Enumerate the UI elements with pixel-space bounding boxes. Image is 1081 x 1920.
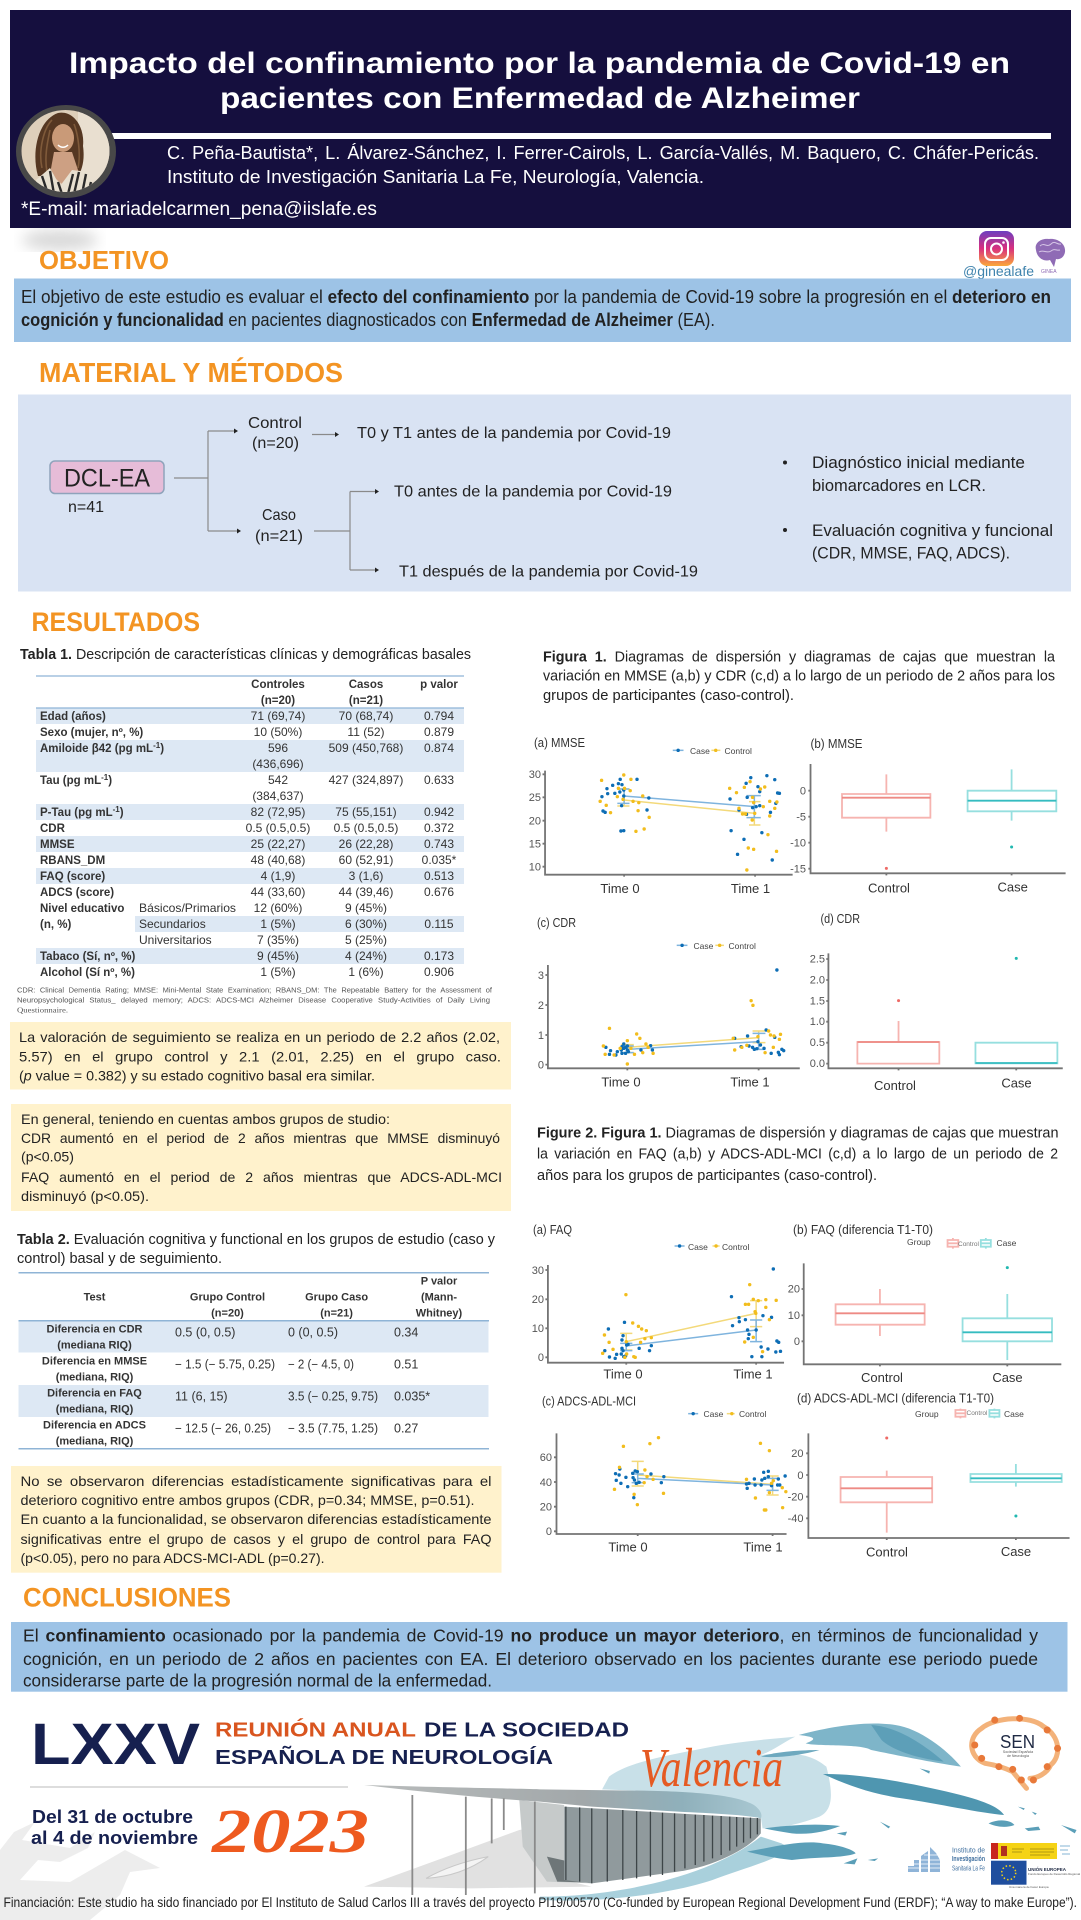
table 1: 1 (5%) (260, 917, 296, 931)
instagram handle: @ginealafe (963, 263, 1034, 279)
chart: figure 1d CDR boxplot: (d) CDR (820, 912, 860, 926)
callout: seguimiento: 5.57) en el grupo control y 2.1 (2.01, 2.25) en el grupo caso. (19, 1048, 501, 1064)
chart: figure 1b MMSE boxplot: Control (868, 880, 910, 896)
event title: DE LA SOCIEDAD (424, 1720, 629, 1742)
chart: figure 2d ADCS boxplot: 0 (797, 1470, 804, 1482)
table 1: 0.372 (424, 821, 454, 835)
logo: European Union: Fondo Europeo de Desarrollo Regional (1028, 1872, 1080, 1876)
logo: Instituto de Investigación: Investigación (952, 1854, 985, 1863)
chart: figure 2a FAQ scatter: 30 (532, 1265, 544, 1277)
table 1: Controles (251, 679, 305, 691)
table 2: Grupo Control (190, 1292, 265, 1304)
table 1: 0.5 (0.5,0.5) (334, 821, 398, 835)
label n=41: n=41 (68, 499, 104, 516)
chart: figure 2a FAQ scatter: 10 (532, 1323, 544, 1335)
table 2 caption (17, 1232, 496, 1267)
box: DCL-EA (50, 461, 164, 494)
callout: seguimiento: La valoración de seguimiento se realiza en un periodo de 2.2 años (2.02, (19, 1029, 500, 1045)
title: pacientes con Enfermedad de Alzheimer (220, 82, 860, 115)
bullet list: biomarcadores en LCR. (812, 476, 986, 495)
table 1: 0.5 (0.5,0.5) (246, 821, 310, 835)
callout: resultados generales: disminuyó (p<0.05). (21, 1188, 149, 1204)
table 1 footnote: Questionnaire. (17, 1006, 68, 1014)
bullet list (783, 453, 1053, 562)
table 1: MMSE (40, 839, 75, 851)
panel: conclusiones: cognición, en un periodo de 2 años en pacientes con EA. El deterioro observado en los pacientes durante ese periodo puede (23, 1649, 1038, 1669)
logo: European Union: UNIÓN EUROPEA (1028, 1865, 1067, 1872)
table 2: (mediana RIQ) (57, 1339, 132, 1351)
table 2 (18, 1273, 489, 1449)
chart: figure 2b FAQ boxplot (788, 1223, 1061, 1385)
table 1: 6 (30%) (345, 917, 387, 931)
chart: figure 1d CDR boxplot: 0.0 (810, 1058, 825, 1070)
table 1: p valor (420, 679, 458, 691)
figure 1 caption (543, 650, 1056, 704)
group labels (248, 415, 698, 580)
table 1: 0.743 (424, 837, 454, 851)
table 2: Diferencia en MMSE (42, 1355, 147, 1367)
chart: figure 2c ADCS scatter: Time 1 (743, 1540, 783, 1555)
logo: Instituto de Investigación: Instituto de (952, 1846, 985, 1855)
table 1: 0.513 (424, 869, 454, 883)
watercolor and building illustration (364, 1723, 1077, 1901)
table 1: FAQ (score) (40, 871, 105, 883)
chart: figure 2d ADCS boxplot: Control (966, 1410, 988, 1417)
chart: figure 2b FAQ boxplot: Case (996, 1238, 1017, 1248)
table 1: Básicos/Primarios (139, 901, 236, 915)
chart: figure 1d CDR boxplot: Case (1001, 1076, 1032, 1090)
callout: diferencias: No se observaron diferencias estadísticamente significativas para el (20, 1473, 492, 1489)
chart: figure 2b FAQ boxplot: 0 (794, 1336, 800, 1348)
table 1: 9 (45%) (345, 901, 387, 915)
chart: figure 2b FAQ boxplot: (b) FAQ (diferencia T1-T0) (793, 1223, 933, 1237)
logo: Instituto de Investigación (908, 1846, 985, 1873)
table 1: Casos (349, 679, 383, 691)
panel: objetivo: El objetivo de este estudio es evaluar el efecto del confinamiento por la pandemia de Covid-19 sobre la progresión en el deterioro en (21, 287, 1051, 307)
table 1: -1 (101, 773, 109, 782)
callout: diferencias: significativas entre el grupo de casos y el grupo de control para FAQ (20, 1531, 492, 1547)
table 1: 0.035* (422, 853, 457, 867)
table 1: 75 (55,151) (335, 805, 397, 819)
chart: figure 1d CDR boxplot: 1.5 (810, 996, 825, 1008)
table 1 caption: Tabla 1. Descripción de características clínicas y demográficas basales (20, 647, 471, 663)
authors (167, 143, 1039, 187)
callout: seguimiento: (p value = 0.382) y su estado cognitivo basal era similar. (19, 1068, 375, 1084)
chart: figure 2a FAQ scatter (532, 1223, 784, 1382)
table 1: 10 (50%) (254, 725, 302, 739)
chart: figure 2d ADCS boxplot: 20 (791, 1448, 804, 1460)
table 1 footnote: Neuropsychological Status_ delayed memory; ADCS: ADCS-MCI Alzheimer Disease Cooperative Study-Activities of Daily Living (17, 996, 490, 1004)
table 1: CDR (40, 823, 66, 835)
table 1: (n=20) (261, 695, 295, 707)
event title: REUNIÓN ANUAL (215, 1718, 416, 1742)
logo: Spain ministry (991, 1843, 1070, 1859)
chart: figure 1c CDR scatter: Case (694, 941, 714, 951)
callout: seguimiento (10, 1022, 511, 1090)
heading: objetivo: OBJETIVO (39, 245, 169, 275)
icon: brain logo: GINEA (1041, 269, 1057, 275)
chart: figure 2d ADCS boxplot: -40 (788, 1513, 804, 1525)
box: DCL-EA: DCL-EA (64, 464, 150, 492)
table 1: 0.115 (424, 917, 454, 931)
figure 2 caption: Figure 2. Figura 1. Diagramas de dispersión y diagramas de cajas que muestran (537, 1126, 1058, 1142)
table 1: 0.676 (424, 885, 454, 899)
chart: figure 1b MMSE boxplot (790, 737, 1066, 896)
table 2: (mediana, RIQ) (56, 1403, 134, 1415)
table 1: 4 (1,9) (261, 869, 295, 883)
figure 2 caption: la variación en FAQ (a,b) y ADCS-ADL-MCI (c,d) a lo largo de un periodo de 2 (537, 1147, 1058, 1163)
table 1: 4 (24%) (345, 949, 387, 963)
table 2: − 12.5 (− 26, 0.25) (175, 1422, 271, 1436)
figure 2 caption (537, 1126, 1058, 1184)
table 2: 11 (6, 15) (175, 1390, 228, 1404)
chart: figure 1a MMSE scatter: Control (724, 746, 752, 756)
chart: figure 2b FAQ boxplot: Control (861, 1370, 903, 1385)
table 2: 0.27 (394, 1422, 418, 1436)
table 2: Grupo Caso (305, 1292, 368, 1304)
chart: figure 1c CDR scatter: Time 0 (601, 1074, 641, 1090)
chart: figure 1a MMSE scatter: Case (690, 746, 710, 756)
bullet list: Evaluación cognitiva y funcional (812, 521, 1053, 540)
chart: figure 1a MMSE scatter: Time 0 (600, 881, 640, 896)
panel: conclusiones: considerarse parte de la progresión normal de la enfermedad. (23, 1671, 492, 1691)
group labels: T0 antes de la pandemia por Covid-19 (394, 484, 672, 500)
banner: congreso artwork (0, 1712, 1080, 1920)
table 1: 7 (35%) (257, 933, 299, 947)
callout: resultados generales (11, 1104, 511, 1211)
table 2 caption: control) basal y de seguimiento. (17, 1251, 222, 1267)
table 1: Amiloide β42 (pg mL (40, 743, 153, 755)
panel: objetivo: cognición y funcionalidad en pacientes diagnosticados con Enfermedad de Alzheimer (EA). (21, 310, 715, 330)
chart: figure 1a MMSE scatter (529, 736, 793, 896)
table 1: 0.633 (424, 773, 454, 787)
heading: material y métodos: MATERIAL Y MÉTODOS (39, 357, 343, 388)
chart: figure 1c CDR scatter: Control (728, 941, 756, 951)
bullet list: Diagnóstico inicial mediante (812, 453, 1025, 472)
panel: conclusiones: El confinamiento ocasionado por la pandemia de Covid-19 no produce un mayor deterioro, en términos de funcionalidad y (23, 1626, 1038, 1646)
chart: figure 2a FAQ scatter: Time 1 (733, 1366, 773, 1382)
chart: figure 2c ADCS scatter: Time 0 (608, 1540, 648, 1555)
table 1: 542 (268, 773, 288, 787)
table 1: 0.879 (424, 725, 454, 739)
logo: European Union (991, 1861, 1080, 1889)
callout: resultados generales: (p<0.05) (21, 1148, 74, 1164)
table 1: 48 (40,68) (251, 853, 305, 867)
event title: LXXV (31, 1712, 200, 1777)
chart: figure 1d CDR boxplot: 2.0 (810, 974, 825, 986)
group labels: (n=20) (252, 435, 299, 452)
table 2: Diferencia en ADCS (43, 1419, 146, 1431)
table 2: (mediana, RIQ) (56, 1435, 134, 1447)
authors: Instituto de Investigación Sanitaria La Fe, Neurología, Valencia. (167, 167, 704, 187)
callout: resultados generales: FAQ aumentó en el period de 2 años mientras que ADCS-ADL-MCI (21, 1169, 502, 1185)
table 1: Alcohol (Sí nº, %) (40, 967, 135, 979)
table 1: 3 (1,6) (349, 869, 383, 883)
chart: figure 1a MMSE scatter: 20 (529, 816, 541, 828)
logo: SEN (972, 1718, 1058, 1788)
table 1: 12 (60%) (254, 901, 302, 915)
table 1: (n, %) (40, 919, 71, 931)
header banner (10, 10, 1071, 228)
chart: figure 2d ADCS boxplot: -20 (788, 1492, 804, 1504)
panel: material y métodos (18, 394, 1071, 592)
table 1: 9 (45%) (257, 949, 299, 963)
chart: figure 1a MMSE scatter: (a) MMSE (534, 736, 585, 750)
chart: figure 2a FAQ scatter: Case (688, 1242, 708, 1252)
chart: figure 1b MMSE boxplot: -15 (790, 864, 806, 876)
table 1: -1 (153, 741, 161, 750)
email: *E-mail: mariadelcarmen_pena@iislafe.es (21, 199, 377, 220)
heading: conclusiones: CONCLUSIONES (23, 1583, 231, 1613)
chart: figure 2b FAQ boxplot: Case (992, 1370, 1023, 1385)
table 1: 44 (39,46) (339, 885, 393, 899)
chart: figure 2a FAQ scatter: Time 0 (603, 1366, 643, 1382)
table 2: (Mann- (421, 1292, 457, 1304)
year: 2023 (211, 1798, 369, 1866)
event dates (31, 1807, 198, 1848)
chart: figure 2c ADCS scatter (540, 1395, 787, 1555)
chart: figure 2a FAQ scatter: Control (722, 1242, 750, 1252)
chart: figure 2b FAQ boxplot: 10 (788, 1310, 800, 1322)
table 2: 0.035* (394, 1390, 430, 1404)
chart: figure 2c ADCS scatter: 60 (540, 1452, 552, 1464)
table 1: Secundarios (139, 917, 206, 931)
city: Valencia (640, 1737, 783, 1798)
table 1 footnote: CDR: Clinical Dementia Rating; MMSE: Mini-Mental State Examination; RBANS_DM: The Repeatable Battery for the Assessment of (17, 986, 493, 994)
title: Impacto del confinamiento por la pandemia de Covid-19 en (69, 47, 1010, 80)
chart: figure 1c CDR scatter: 0 (538, 1060, 544, 1072)
table 2: 0.51 (394, 1358, 418, 1372)
table 1: 0.173 (424, 949, 454, 963)
callout: diferencias (11, 1466, 502, 1573)
table 1: Nivel educativo (40, 903, 124, 915)
logo: Instituto de Investigación: Sanitaria La Fe (952, 1864, 985, 1873)
table 1 (36, 676, 464, 979)
table 1: RBANS_DM (40, 855, 105, 867)
bullet list: (CDR, MMSE, FAQ, ADCS). (812, 544, 1010, 562)
chart: figure 2d ADCS boxplot (788, 1392, 1070, 1560)
event dates: Del 31 de octubre (32, 1807, 193, 1827)
table 2: − 1.5 (− 5.75, 0.25) (175, 1358, 275, 1372)
table 2: Diferencia en FAQ (47, 1387, 142, 1399)
chart: figure 2c ADCS scatter: Case (704, 1409, 724, 1419)
table 1: 26 (22,28) (339, 837, 393, 851)
chart: figure 1d CDR boxplot: 0.5 (810, 1037, 825, 1049)
chart: figure 2a FAQ scatter: (a) FAQ (533, 1223, 572, 1237)
title (69, 47, 1010, 115)
table 1: ADCS (score) (40, 887, 114, 899)
group labels: (n=21) (255, 528, 303, 545)
chart: figure 2d ADCS boxplot: Control (866, 1545, 908, 1560)
chart: figure 2b FAQ boxplot: Control (958, 1241, 980, 1248)
table 2: (n=21) (320, 1308, 353, 1320)
table 2: 0 (0, 0.5) (288, 1326, 338, 1340)
table 1: (n=21) (349, 695, 383, 707)
logo: SEN: Sociedad Española (1003, 1750, 1033, 1754)
table 1: Tau (pg mL (40, 775, 101, 787)
chart: figure 2d ADCS boxplot: Group (915, 1409, 939, 1419)
table 2: (mediana, RIQ) (56, 1371, 134, 1383)
chart: figure 2c ADCS scatter: 20 (540, 1502, 552, 1514)
table 1: 596 (268, 741, 288, 755)
chart: figure 1b MMSE boxplot: -10 (790, 838, 806, 850)
table 1: 70 (68,74) (339, 709, 393, 723)
table 1: ) (120, 807, 124, 819)
logo: SEN: de Neurología (1007, 1754, 1029, 1758)
table 1: Tabaco (Sí, nº, %) (40, 951, 136, 963)
table 2: 3.5 (− 0.25, 9.75) (288, 1390, 378, 1404)
table 2: Whitney) (416, 1308, 463, 1320)
table 2: Diferencia en CDR (47, 1323, 143, 1335)
table 2: (n=20) (211, 1308, 244, 1320)
callout: diferencias: deterioro cognitivo entre ambos grupos (CDR, p=0.34; MMSE, p=0.51). (20, 1492, 474, 1508)
chart: figure 2d ADCS boxplot: (d) ADCS-ADL-MCI (diferencia T1-T0) (797, 1392, 994, 1406)
figure 1 caption: variación en MMSE (a,b) y CDR (c,d) a lo largo de un periodo de 2 años para los (543, 669, 1055, 685)
table 1: Universitarios (139, 933, 212, 947)
chart: figure 1d CDR boxplot: 2.5 (810, 954, 825, 966)
figure 2 caption: años para los grupos de participantes (caso-control). (537, 1168, 877, 1184)
table 1: Edad (años) (40, 711, 106, 723)
table 1: 0.874 (424, 741, 454, 755)
table 1: 0.906 (424, 965, 454, 979)
icon: brain logo (1036, 239, 1065, 275)
panel: objetivo (14, 278, 1071, 342)
table 1: P-Tau (pg mL (40, 807, 113, 819)
chart: figure 1d CDR boxplot (810, 912, 1063, 1093)
chart: figure 1a MMSE scatter: Time 1 (731, 881, 770, 896)
event title (31, 1712, 629, 1777)
table 1: 25 (22,27) (251, 837, 305, 851)
table 1: 1 (5%) (260, 965, 296, 979)
table 2: 0.34 (394, 1326, 418, 1340)
chart: figure 2b FAQ boxplot: 20 (788, 1284, 800, 1296)
chart: figure 1c CDR scatter (537, 916, 800, 1090)
chart: figure 1b MMSE boxplot: 0 (800, 786, 806, 798)
table 1: Sexo (mujer, nº, %) (40, 727, 143, 739)
chart: figure 1a MMSE scatter: 25 (529, 792, 541, 804)
chart: figure 2c ADCS scatter: Control (739, 1409, 767, 1419)
table 1: 1 (6%) (348, 965, 384, 979)
author photo (16, 105, 116, 198)
table 1: 11 (52) (347, 725, 385, 739)
table 1: 0.794 (424, 709, 454, 723)
table 1: 60 (52,91) (339, 853, 393, 867)
heading: resultados: RESULTADOS (32, 607, 200, 637)
authors: C. Peña-Bautista*, L. Álvarez-Sánchez, I. Ferrer-Cairols, L. García-Vallés, M. Baquero, C. Cháfer-Pericás. (167, 143, 1039, 163)
table 1: 427 (324,897) (329, 773, 403, 787)
panel: conclusiones (11, 1622, 1068, 1692)
chart: figure 1a MMSE scatter: 10 (529, 862, 541, 874)
callout: diferencias: (p<0.05), pero no para ADCS-MCI-ADL (p=0.27). (20, 1550, 324, 1566)
chart: figure 1d CDR boxplot: Control (874, 1078, 916, 1093)
table 1: 82 (72,95) (251, 805, 305, 819)
chart: figure 2d ADCS boxplot: Case (1004, 1409, 1024, 1419)
chart: figure 1b MMSE boxplot: Case (998, 880, 1028, 894)
chart: figure 1b MMSE boxplot: (b) MMSE (810, 737, 862, 751)
table 1: 71 (69,74) (251, 709, 305, 723)
table 1: -1 (113, 805, 120, 814)
table 1: 44 (33,60) (251, 885, 305, 899)
chart: figure 1c CDR scatter: Time 1 (730, 1074, 770, 1090)
table 2: 0.5 (0, 0.5) (175, 1326, 235, 1340)
table 2 caption: Tabla 2. Evaluación cognitiva y functional en los grupos de estudio (caso y (17, 1232, 496, 1248)
chart: figure 1c CDR scatter: (c) CDR (537, 916, 576, 930)
table 2: − 2 (− 4.5, 0) (288, 1358, 354, 1372)
table 1: 0.942 (424, 805, 454, 819)
group labels: T0 y T1 antes de la pandemia por Covid-19 (357, 425, 671, 442)
chart: figure 1c CDR scatter: 2 (538, 1000, 544, 1012)
chart: figure 1b MMSE boxplot: -5 (796, 812, 806, 824)
chart: figure 1c CDR scatter: 3 (538, 970, 544, 982)
chart: figure 1a MMSE scatter: 30 (529, 769, 541, 781)
table 1: 509 (450,768) (329, 741, 403, 755)
chart: figure 2b FAQ boxplot: Group (907, 1237, 931, 1247)
table 1: ) (160, 743, 164, 755)
chart: figure 2a FAQ scatter: 0 (538, 1352, 544, 1364)
icon: instagram (979, 231, 1014, 266)
figure 1 caption: grupos de participantes (caso-control). (543, 688, 794, 704)
chart: figure 1a MMSE scatter: 15 (529, 838, 541, 850)
table 1: ) (108, 775, 112, 787)
group labels: T1 después de la pandemia por Covid-19 (399, 564, 698, 580)
table 1: (384,637) (252, 789, 304, 803)
callout: resultados generales: CDR aumentó en el period de 2 años mientras que MMSE disminuyó (21, 1130, 500, 1146)
logo: European Union: Una manera de hacer Europa (1009, 1885, 1049, 1889)
flow arrows (174, 428, 379, 572)
event title: ESPAÑOLA DE NEUROLOGÍA (215, 1746, 553, 1769)
logo: SEN: SEN (1000, 1732, 1035, 1752)
group labels: Control (248, 415, 302, 432)
chart: figure 2c ADCS scatter: 0 (546, 1526, 552, 1538)
table 2: − 3.5 (7.75, 1.25) (288, 1422, 378, 1436)
background branches (0, 1822, 160, 1920)
chart: figure 1c CDR scatter: 1 (538, 1030, 544, 1042)
table 1 footnote (17, 986, 493, 1014)
callout: diferencias: En cuanto a la funcionalidad, se observaron diferencias estadísticamente (20, 1511, 492, 1527)
callout: resultados generales: En general, teniendo en cuentas ambos grupos de studio: (21, 1111, 390, 1127)
table 1: (436,696) (252, 757, 304, 771)
chart: figure 2c ADCS scatter: (c) ADCS-ADL-MCI (542, 1395, 636, 1409)
figure 1 caption: Figura 1. Diagramas de dispersión y diagramas de cajas que muestran la (543, 650, 1056, 666)
table 2: P valor (421, 1276, 458, 1288)
chart: figure 2a FAQ scatter: 20 (532, 1294, 544, 1306)
chart: figure 2c ADCS scatter: 40 (540, 1477, 552, 1489)
table 1: 5 (25%) (345, 933, 387, 947)
group labels: Caso (262, 507, 296, 524)
table 2: Test (84, 1292, 106, 1304)
event dates: al 4 de noviembre (31, 1828, 198, 1848)
chart: figure 1d CDR boxplot: 1.0 (810, 1016, 825, 1028)
chart: figure 2d ADCS boxplot: Case (1001, 1544, 1031, 1559)
